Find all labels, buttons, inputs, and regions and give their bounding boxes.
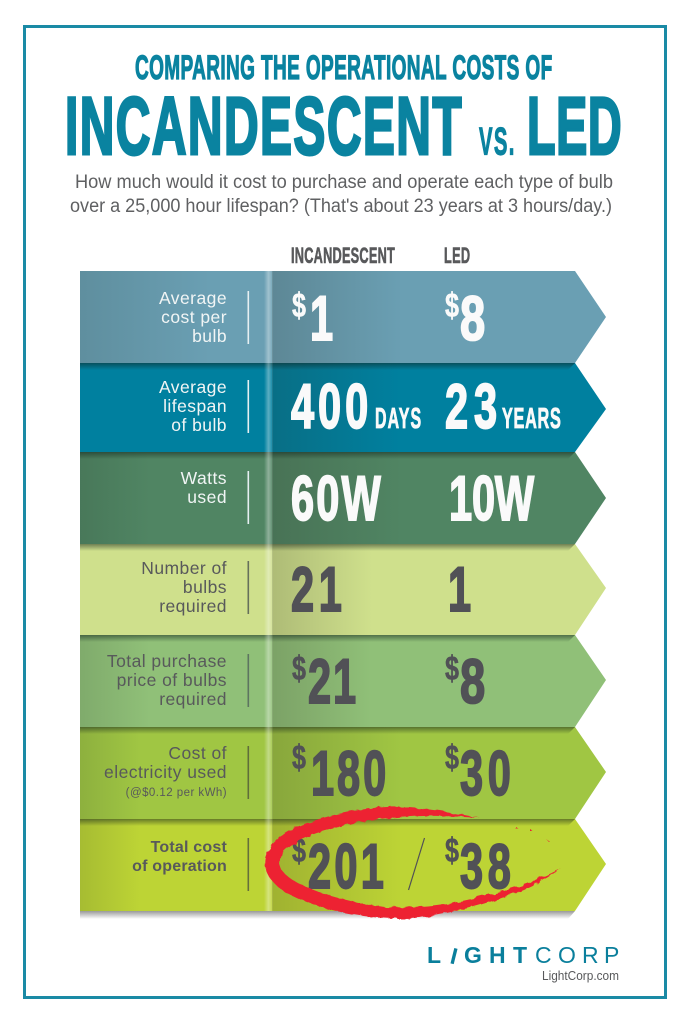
- incandescent value: $1: 1: [310, 285, 333, 354]
- incandescent value: 60W: 60W: [291, 465, 381, 534]
- row 3 label: Watts: [181, 468, 227, 488]
- header: LED: LED: [444, 243, 470, 268]
- LED value: $8: $: [445, 650, 459, 688]
- header: incandescent: INCANDESCENT: [291, 243, 395, 268]
- incandescent value: $1: [292, 285, 333, 354]
- row: cost of electricity used: [80, 727, 606, 819]
- LED value: $8: [445, 283, 485, 354]
- row 1 label: Average: [159, 288, 227, 308]
- logo wordmark: [427, 942, 619, 969]
- incandescent value: $21: $: [292, 650, 306, 688]
- row 6 label: Cost of: [168, 743, 227, 763]
- row 1 band: [80, 271, 606, 363]
- logo wordmark: CORP: [535, 942, 619, 968]
- red hand-drawn circle: [265, 807, 561, 919]
- LED value: 23 years: YEARS: [502, 402, 561, 434]
- incandescent value: $201: 201: [308, 833, 384, 902]
- incandescent value: 400 days: [291, 373, 421, 442]
- row: number of bulbs required: [80, 544, 606, 635]
- LED value: $8: 8: [460, 646, 485, 717]
- incandescent value: $1: $: [292, 287, 306, 325]
- row 3 label: used: [187, 487, 227, 507]
- row 2 label: Average: [159, 377, 227, 397]
- row: total purchase price of bulbs required: [80, 635, 606, 727]
- row 2 label: of bulb: [171, 415, 227, 435]
- LED value: $8: [445, 646, 485, 717]
- incandescent value: $180: 180: [311, 740, 386, 809]
- LED value: 10W: 10W: [449, 465, 535, 534]
- row: average cost per bulb: [80, 271, 606, 363]
- LED value: $30: 30: [460, 740, 511, 809]
- incandescent value: 400 days: DAYS: [375, 402, 421, 434]
- row 4 label: bulbs: [183, 577, 227, 597]
- LED value: $38: 38: [460, 833, 511, 902]
- LED value: 23 years: [445, 373, 561, 442]
- intro text: [70, 172, 613, 217]
- incandescent value: $180: $: [292, 739, 306, 777]
- row 2 band: [80, 363, 606, 452]
- LED value: 1: 1: [448, 556, 471, 625]
- row 1 label: cost per: [161, 307, 227, 327]
- incandescent value: $21: 21: [308, 648, 356, 717]
- logo: [427, 942, 619, 983]
- incandescent value: 21: 21: [291, 556, 342, 625]
- LED value: $8: $: [445, 287, 459, 325]
- row: watts used: [80, 452, 606, 544]
- LED value: 23 years: 23: [445, 373, 497, 442]
- incandescent value: 400 days: 400: [291, 373, 368, 442]
- row 2 label: lifespan: [163, 396, 227, 416]
- LED value: $38: $: [445, 832, 459, 870]
- title word: incandescent: INCANDESCENT: [65, 81, 462, 172]
- slash divider: [408, 838, 424, 890]
- row 5 band: [80, 635, 606, 727]
- logo wordmark: LIGHT: [427, 942, 527, 969]
- LED value: $30: $: [445, 739, 459, 777]
- title: [65, 48, 622, 172]
- title word: vs.: VS.: [479, 119, 514, 163]
- row 4 label: Number of: [141, 558, 227, 578]
- row 5 label: price of bulbs: [117, 670, 227, 690]
- row 6 label: electricity used: [104, 762, 227, 782]
- row 6 band: [80, 727, 606, 819]
- bottom shadow of chart: [80, 911, 575, 919]
- logo url: LightCorp.com: [542, 968, 619, 983]
- row: average lifespan of bulb: [80, 363, 606, 452]
- intro line 2: over a 25,000 hour lifespan? (That's about 23 years at 3 hours/day.): [70, 196, 612, 217]
- row 3 band: [80, 452, 606, 544]
- row 6 label: (@$0.12 per kWh): [126, 787, 227, 799]
- vertical light strip: [264, 271, 273, 911]
- row: total cost of operation: [80, 819, 606, 911]
- row 7 band: [80, 819, 606, 911]
- LED value: $8: 8: [460, 283, 485, 354]
- row 1 label: bulb: [192, 326, 227, 346]
- row 5 label: required: [159, 689, 227, 709]
- row 7 label: Total cost: [151, 839, 227, 856]
- incandescent value: $201: $: [292, 832, 306, 870]
- title line 1: COMPARING THE OPERATIONAL COSTS OF: [135, 48, 552, 86]
- row 7 label: of operation: [132, 858, 227, 875]
- row 4 label: required: [159, 596, 227, 616]
- title word: LED: LED: [527, 82, 622, 172]
- intro line 1: How much would it cost to purchase and operate each type of bulb: [75, 172, 613, 193]
- row 4 band: [80, 544, 606, 635]
- column headers: [291, 243, 470, 268]
- row 5 label: Total purchase: [107, 651, 227, 671]
